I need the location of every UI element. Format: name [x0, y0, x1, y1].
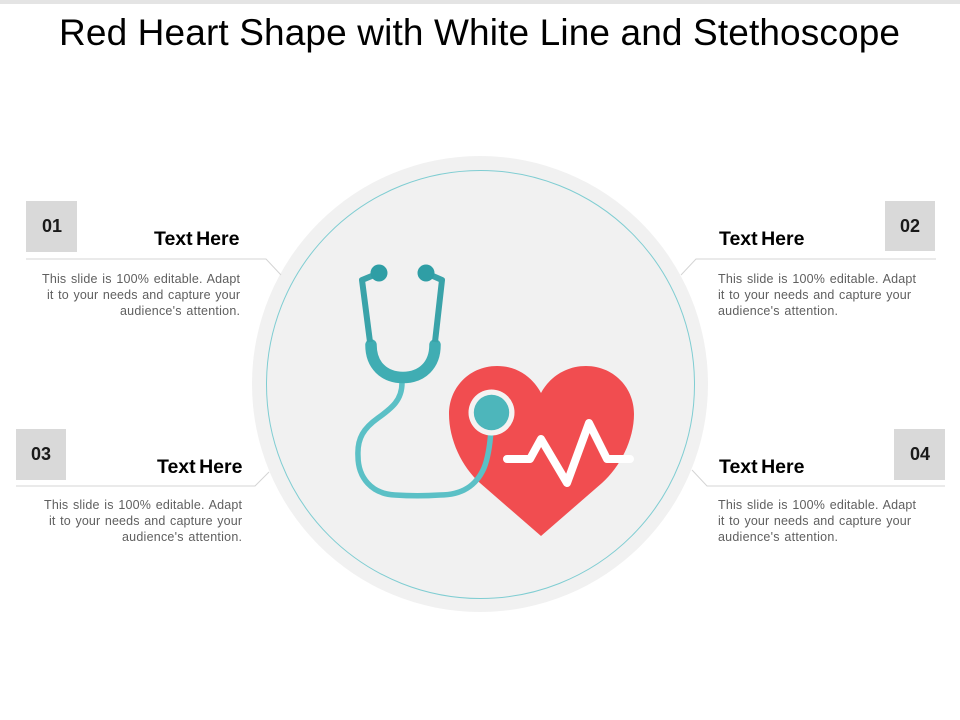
- panel: item 01: it to your needs and capture your: [47, 288, 240, 302]
- panel: item 03: This slide is 100% editable. Adapt: [44, 498, 243, 512]
- panel: item 04: Text Here: [719, 456, 805, 478]
- panel: item 03: it to your needs and capture your: [49, 514, 242, 528]
- panel: item 02: it to your needs and capture your: [718, 288, 911, 302]
- panel: item 04: audience's attention.: [718, 530, 838, 544]
- icon: heart with pulse line: [449, 366, 634, 536]
- panel: item 04: 04: [910, 444, 930, 464]
- panel: item 01: Text Here: [154, 228, 240, 250]
- panel: item 01: 01: [42, 216, 62, 236]
- panel: item 03: audience's attention.: [122, 530, 242, 544]
- panel: item 02: This slide is 100% editable. Adapt: [718, 272, 917, 286]
- panel: item 01: This slide is 100% editable. Adapt: [42, 272, 241, 286]
- panel: item 04: [692, 429, 945, 544]
- panel: item 02: audience's attention.: [718, 304, 838, 318]
- panel: item 04: This slide is 100% editable. Adapt: [718, 498, 917, 512]
- icon: stethoscope: [358, 264, 514, 496]
- panel: item 02: [681, 201, 936, 318]
- panel: item 02: Text Here: [719, 228, 805, 250]
- panel: item 01: audience's attention.: [120, 304, 240, 318]
- panel: item 03: Text Here: [157, 456, 243, 478]
- title: Red Heart Shape with White Line and Stethoscope: [59, 12, 900, 53]
- panel: item 02: 02: [900, 216, 920, 236]
- panel: item 03: 03: [31, 444, 51, 464]
- panel: item 03: [16, 429, 269, 544]
- panel: item 04: it to your needs and capture your: [718, 514, 911, 528]
- central circle: [252, 156, 708, 612]
- panel: item 01: [26, 201, 281, 318]
